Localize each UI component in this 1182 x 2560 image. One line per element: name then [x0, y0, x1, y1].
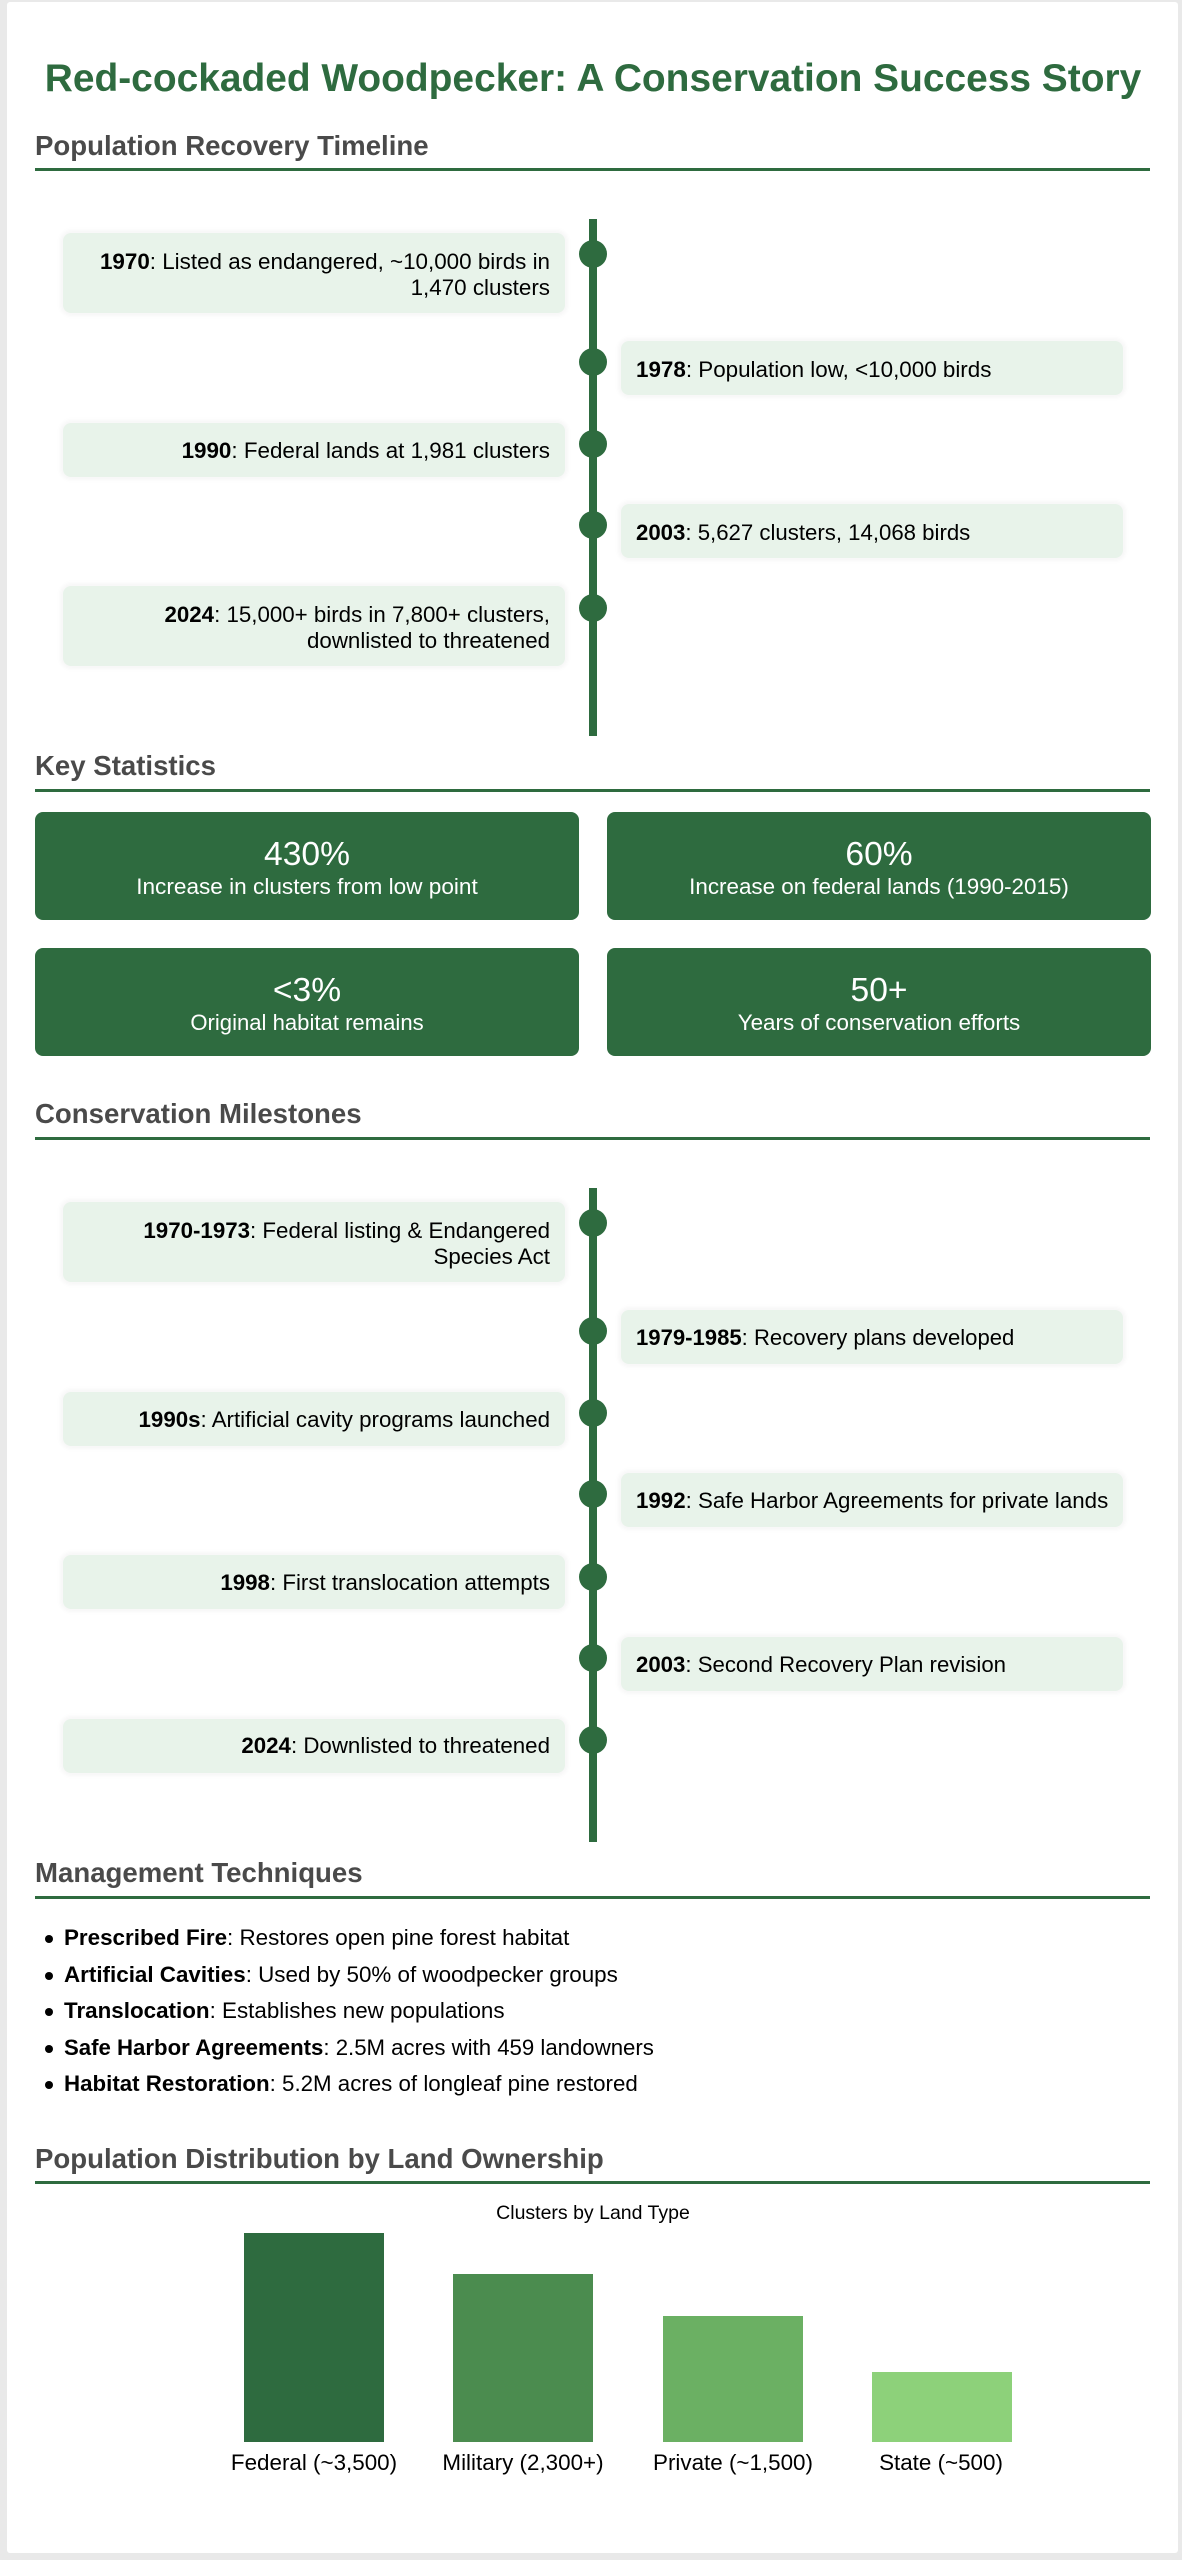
milestone dot 1998	[579, 1562, 607, 1590]
event 2024	[63, 586, 565, 666]
stat: 60%	[607, 812, 1151, 920]
label: Military: Military (2,300+)	[442, 2450, 604, 2475]
label: Federal: Federal (~3,500)	[231, 2450, 397, 2475]
milestone 1992: 1992: Safe Harbor Agreements for private lands	[636, 1488, 1108, 1512]
milestone 1992	[621, 1473, 1123, 1527]
milestone 1990s	[63, 1392, 565, 1446]
stat: 50+: 50+	[851, 972, 907, 1008]
event dot 2003	[579, 511, 607, 539]
heading: Population Distribution by Land Ownership	[35, 2140, 1150, 2184]
milestone dot 2024	[579, 1726, 607, 1754]
list item: Artificial Cavities: Artificial Cavities: Used by 50% of woodpecker groups	[64, 1962, 618, 1986]
milestone 1979-1985	[621, 1310, 1123, 1364]
stat: 430%: Increase in clusters from low point	[136, 874, 478, 898]
milestone 2024	[63, 1718, 565, 1772]
heading: Management Techniques	[35, 1855, 1150, 1899]
heading: Key Statistics	[35, 748, 1150, 792]
milestone 2024: 2024: Downlisted to threatened	[241, 1733, 550, 1758]
chart title: Clusters by Land Type	[496, 2202, 690, 2224]
stat: 60%: 60%	[845, 836, 913, 872]
event 1990: 1990: Federal lands at 1,981 clusters	[182, 438, 550, 462]
panel: key statistics	[35, 812, 1151, 1056]
stat: <3%: Original habitat remains	[190, 1010, 424, 1034]
stat: 430%	[35, 812, 579, 920]
timeline axis	[589, 219, 597, 736]
milestone dot 1990s	[579, 1399, 607, 1427]
list item: Prescribed Fire: Prescribed Fire: Restores open pine forest habitat	[64, 1925, 569, 1950]
event 1970: 1,470 clusters	[411, 274, 550, 300]
list item: Safe Harbor Agreements: Safe Harbor Agreements: 2.5M acres with 459 landowners	[64, 2034, 654, 2060]
milestone dot 1992	[579, 1480, 607, 1508]
heading: Management Techniques: Management Techniques	[35, 1857, 363, 1888]
stat: <3%	[35, 948, 579, 1056]
panel: conservation milestones timeline	[63, 1188, 1123, 1842]
stat: 50+	[607, 948, 1151, 1056]
event 1978	[621, 341, 1123, 395]
milestone 1998: 1998: First translocation attempts	[220, 1570, 550, 1594]
label: Private: Private (~1,500)	[653, 2450, 813, 2475]
event 2003: 2003: 5,627 clusters, 14,068 birds	[636, 520, 970, 544]
event 2024: downlisted to threatened	[307, 628, 550, 652]
heading: Conservation Milestones: Conservation Milestones	[35, 1098, 362, 1129]
milestone 1970-1973: Species Act	[433, 1244, 550, 1268]
milestone 1998	[63, 1555, 565, 1609]
milestone 1970-1973: 1970-1973: Federal listing & Endangered	[143, 1218, 550, 1242]
heading: Key Statistics: Key Statistics	[35, 750, 216, 781]
milestone 1970-1973	[63, 1202, 565, 1282]
stat: 430%: 430%	[264, 836, 350, 872]
milestone 2003: 2003: Second Recovery Plan revision	[636, 1652, 1006, 1676]
stat: <3%: <3%	[273, 972, 341, 1008]
list item: Translocation: Translocation: Establishes new populations	[64, 1998, 505, 2023]
heading: Population Recovery Timeline	[35, 127, 1150, 171]
stat: 60%: Increase on federal lands (1990-2015)	[689, 874, 1069, 898]
heading: Population Recovery Timeline: Population Recovery Timeline	[35, 130, 429, 160]
event 1990	[63, 423, 565, 477]
heading: Conservation Milestones	[35, 1096, 1150, 1140]
bar chart: clusters by land type	[231, 2202, 1012, 2475]
milestone 2003	[621, 1637, 1123, 1691]
timeline axis	[589, 1188, 597, 1842]
list item: Habitat Restoration: Habitat Restoration: 5.2M acres of longleaf pine restored	[64, 2071, 638, 2096]
label: State: State (~500)	[879, 2450, 1003, 2475]
bar: Federal	[244, 2233, 384, 2442]
milestone dot 1970-1973	[579, 1209, 607, 1237]
panel: management techniques list	[45, 1925, 654, 2096]
event 2003	[621, 504, 1123, 558]
bar: Military	[453, 2274, 593, 2442]
panel: population recovery timeline	[63, 219, 1123, 736]
event 1970: 1970: Listed as endangered, ~10,000 birds in	[100, 248, 550, 274]
event dot 1978	[579, 348, 607, 376]
event 1978: 1978: Population low, <10,000 birds	[636, 356, 991, 382]
stat: 50+: Years of conservation efforts	[738, 1010, 1020, 1034]
milestone dot 1979-1985	[579, 1317, 607, 1345]
event 1970	[63, 233, 565, 313]
event dot 1990	[579, 430, 607, 458]
milestone dot 2003	[579, 1644, 607, 1672]
milestone 1990s: 1990s: Artificial cavity programs launched	[139, 1406, 550, 1432]
title: Red-cockaded Woodpecker: A Conservation Success Story	[45, 57, 1141, 100]
bar: State	[872, 2372, 1012, 2442]
heading: Population Distribution by Land Ownership: Population Distribution by Land Ownership	[35, 2142, 604, 2174]
event 2024: 2024: 15,000+ birds in 7,800+ clusters,	[164, 602, 550, 626]
milestone 1979-1985: 1979-1985: Recovery plans developed	[636, 1324, 1014, 1350]
bar: Private	[662, 2316, 802, 2442]
event dot 2024	[579, 594, 607, 622]
event dot 1970	[579, 240, 607, 268]
